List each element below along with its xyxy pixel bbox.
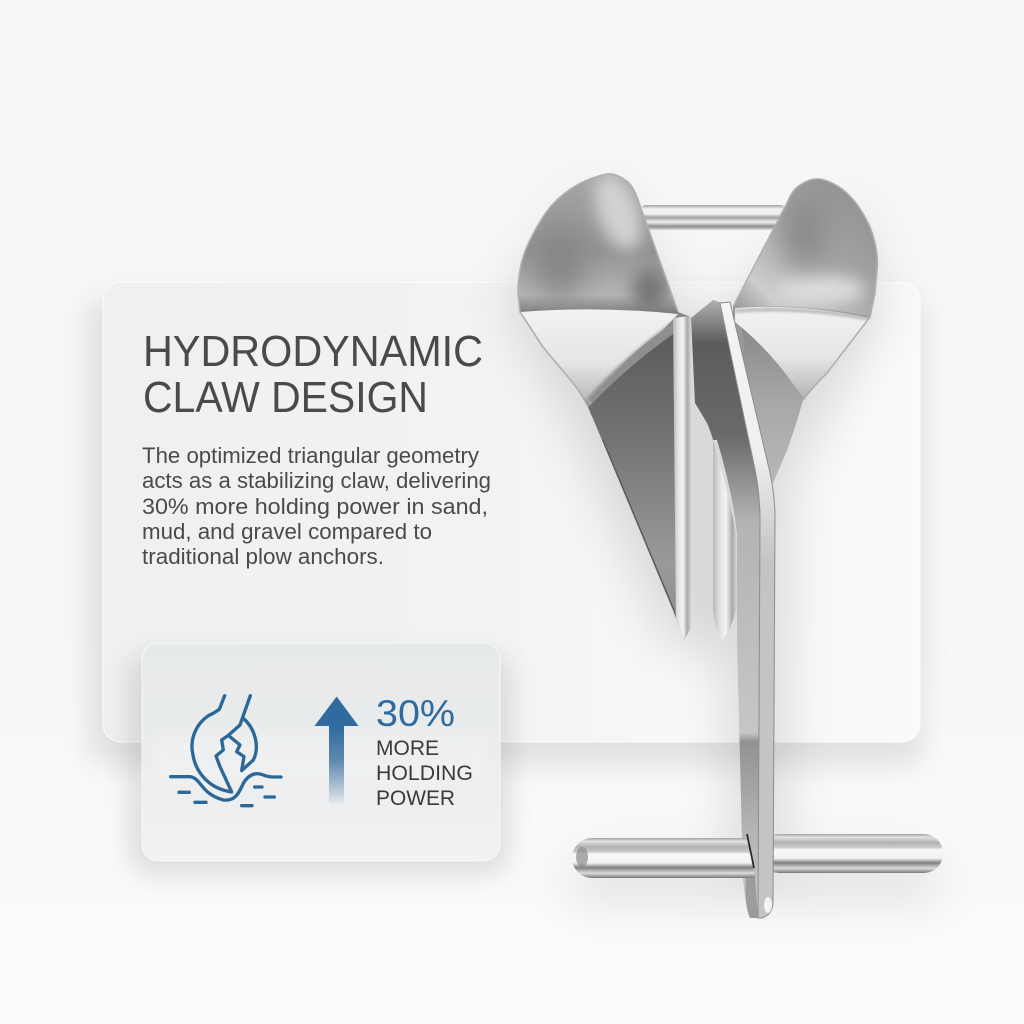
- right stock bar: [760, 834, 943, 873]
- stock end cap: [576, 847, 588, 867]
- shank eye: [746, 878, 758, 918]
- left fluke bright band: [520, 309, 678, 405]
- left stock bar: [572, 838, 755, 878]
- slit: [747, 834, 754, 868]
- body text: [142, 443, 491, 569]
- heading: CLAW DESIGN: [143, 373, 428, 422]
- body text: acts as a stabilizing claw, delivering: [142, 468, 491, 493]
- right fluke lower blade: [742, 328, 803, 483]
- shank bright edge: [720, 302, 775, 918]
- stat label: POWER: [376, 787, 455, 810]
- anchor shadow: [505, 190, 940, 900]
- inner rib: [713, 440, 737, 640]
- stat label: HOLDING: [376, 762, 473, 785]
- body text: mud, and gravel compared to: [142, 519, 432, 544]
- shank end highlight: [764, 897, 772, 913]
- shank plate: [691, 300, 762, 918]
- body text: 30% more holding power in sand,: [142, 494, 488, 519]
- right fluke: [732, 178, 878, 483]
- stat label: [376, 737, 473, 810]
- panel: stat card: [130, 643, 508, 874]
- stat: 30%: 30%: [376, 693, 455, 734]
- icon: claw anchor in seabed: [171, 696, 281, 806]
- heading: [143, 327, 483, 422]
- illustration: anchor: [510, 165, 943, 918]
- top cross bar: [642, 205, 784, 230]
- left rib: [673, 316, 691, 640]
- body text: The optimized triangular geometry: [142, 443, 479, 468]
- icon: up arrow: [314, 696, 358, 804]
- stat label: MORE: [376, 737, 439, 760]
- left fluke: [517, 173, 691, 640]
- right fluke bright band: [735, 307, 870, 398]
- panel: main card: [88, 282, 924, 766]
- body text: traditional plow anchors.: [142, 544, 384, 569]
- heading: HYDRODYNAMIC: [143, 327, 483, 376]
- left fluke dark lower blade: [588, 332, 685, 640]
